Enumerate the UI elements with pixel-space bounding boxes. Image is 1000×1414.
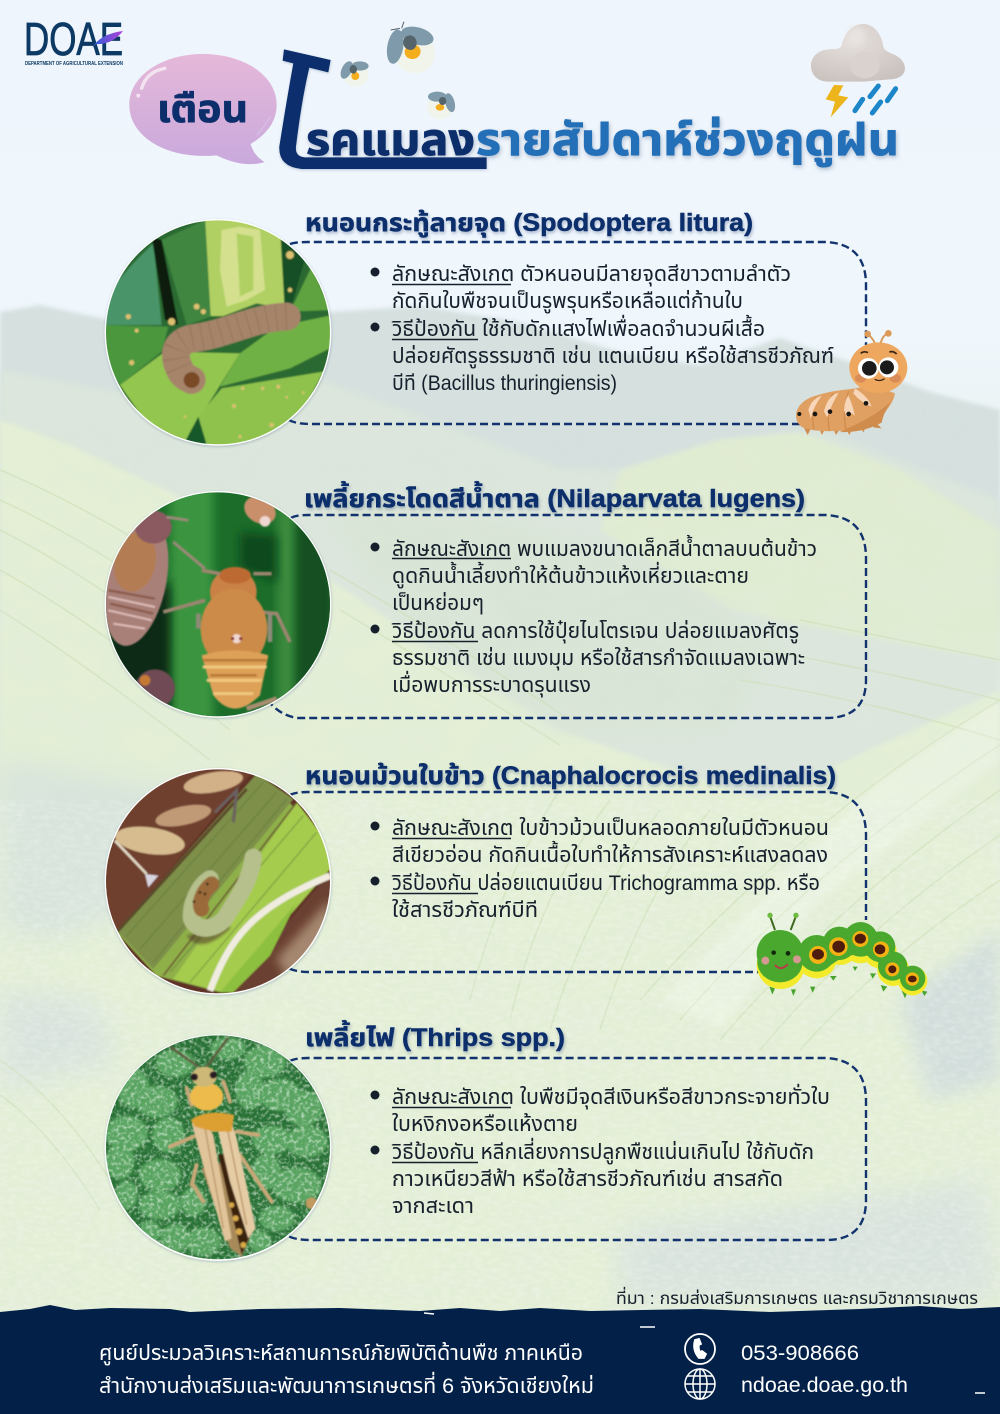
bullet list: signs and prevention: ลักษณะสังเกต ใบข้าวม้วนเป็นหลอดภายในมีตัวหนอน — [392, 816, 829, 840]
photo: rice leaf folder larva — [104, 768, 333, 997]
bullet list: signs and prevention: วิธีป้องกัน หลีกเลี่ยงการปลูกพืชแน่นเกินไป ใช้กับดัก — [392, 1137, 814, 1165]
title: โรคแมลงรายสัปดาห์ช่วงฤดูฝน: รายสัปดาห์ช่วงฤดูฝน — [476, 116, 899, 167]
bullet list: signs and prevention: ดูดกินน้ำเลี้ยงทำให้ต้นข้าวแห้งเหี่ยวและตาย — [392, 561, 749, 589]
bullet list: signs and prevention: วิธีป้องกัน ใช้กับดักแสงไฟเพื่อลดจำนวนผีเสื้อ — [392, 314, 765, 341]
heading: หนอนม้วนใบข้าว (Cnaphalocrocis medinalis) — [305, 762, 836, 790]
logo: DOAE: DOAE — [24, 13, 123, 65]
bullet list: signs and prevention: วิธีป้องกัน ปล่อยแตนเบียน Trichogramma spp. หรือ — [392, 871, 820, 895]
organisation name: สำนักงานส่งเสริมและพัฒนาการเกษตรที่ 6 จังหวัดเชียงใหม่ — [99, 1371, 594, 1398]
heading: หนอนกระทู้ลายจุด (Spodoptera litura) — [305, 209, 753, 238]
bullet list: signs and prevention: กัดกินใบพืชจนเป็นรูพรุนหรือเหลือแต่ก้านใบ — [392, 289, 743, 314]
bullet list: signs and prevention: ธรรมชาติ เช่น แมงมุม หรือใช้สารกำจัดแมลงเฉพาะ — [392, 646, 805, 671]
mottled haze — [472, 640, 960, 992]
icon: rain cloud with lightning — [811, 24, 905, 117]
icon: green caterpillar — [757, 913, 927, 998]
background: misty tea plantation landscape — [0, 304, 1000, 1312]
heading: เพลี้ยไฟ (Thrips spp.) — [305, 1020, 565, 1052]
icon: phone — [685, 1334, 715, 1364]
section: หนอนม้วนใบข้าว — [90, 759, 927, 999]
bullet list: signs and prevention — [370, 1083, 830, 1218]
bullet list: signs and prevention — [370, 816, 829, 922]
bullet list: signs and prevention: วิธีป้องกัน ลดการใช้ปุ๋ยไนโตรเจน ปล่อยแมลงศัตรู — [392, 619, 799, 644]
organisation name: ศูนย์ประมวลวิเคราะห์สถานการณ์ภัยพิบัติด้านพืช ภาคเหนือ — [99, 1341, 583, 1366]
bullet list: signs and prevention: ลักษณะสังเกต ใบพืชมีจุดสีเงินหรือสีขาวกระจายทั่วใบ — [392, 1083, 830, 1110]
icon: fireflies — [338, 22, 457, 119]
bullet list: signs and prevention — [370, 263, 834, 395]
section: หนอนกระทู้ลายจุด — [90, 209, 907, 450]
bullet list: signs and prevention: เป็นหย่อมๆ — [392, 591, 484, 615]
photo: thrips on leaf — [104, 1034, 333, 1264]
heading: เพลี้ยกระโดดสีน้ำตาล (Nilaparvata lugens) — [304, 481, 805, 513]
title flourish: enlarged stem and underline of the first letter — [279, 49, 487, 169]
dashed frame — [271, 515, 866, 718]
phone number: 053-908666 — [741, 1342, 859, 1365]
website: ndoae.doae.go.th — [741, 1374, 908, 1397]
logo wing accent — [92, 31, 123, 48]
footer band — [0, 1286, 1000, 1414]
photo: brown planthopper on rice stem — [104, 490, 333, 720]
section: เพลี้ยกระโดดสีน้ำตาล — [90, 481, 866, 722]
icon: orange caterpillar — [796, 330, 907, 435]
organisation name — [99, 1341, 594, 1398]
bullet list: signs and prevention: บีที (Bacillus thuringiensis) — [392, 372, 617, 395]
bullet list: signs and prevention — [370, 534, 817, 698]
dashed frame — [288, 792, 866, 972]
dashed frame — [289, 242, 866, 424]
bullet list: signs and prevention: ใบหงิกงอหรือแห้งตาย — [392, 1112, 578, 1136]
bullet list: signs and prevention: จากสะเดา — [392, 1195, 474, 1218]
bullet list: signs and prevention: กาวเหนียวสีฟ้า หรือใช้สารชีวภัณฑ์เช่น สารสกัด — [392, 1167, 783, 1191]
bullet list: signs and prevention: ปล่อยศัตรูธรรมชาติ เช่น แตนเบียน หรือใช้สารชีวภัณฑ์ — [392, 344, 834, 369]
section: เพลี้ยไฟ — [90, 1020, 866, 1265]
dashed frame — [288, 1058, 866, 1240]
bullet list: signs and prevention: ลักษณะสังเกต พบแมลงขนาดเล็กสีน้ำตาลบนต้นข้าว — [392, 534, 817, 561]
photo: armyworm on maize leaf — [104, 218, 333, 448]
bullet list: signs and prevention: ใช้สารชีวภัณฑ์บีที — [392, 898, 538, 922]
logo: DOAE: DEPARTMENT OF AGRICULTURAL EXTENSION — [25, 61, 123, 67]
speech bubble: เตือน: เตือน — [157, 89, 248, 131]
bullet list: signs and prevention: ลักษณะสังเกต ตัวหนอนมีลายจุดสีขาวตามลำตัว — [392, 263, 791, 287]
bullet list: signs and prevention: สีเขียวอ่อน กัดกินเนื้อใบทำให้การสังเคราะห์แสงลดลง — [392, 840, 828, 867]
terrace rows — [0, 470, 1000, 1210]
title: โรคแมลงรายสัปดาห์ช่วงฤดูฝน — [279, 49, 899, 169]
speech bubble: เตือน — [129, 54, 277, 164]
title: โรคแมลงรายสัปดาห์ช่วงฤดูฝน: รคแมลง — [306, 116, 475, 165]
bullet list: signs and prevention: เมื่อพบการระบาดรุนแรง — [392, 670, 591, 698]
source credit: ที่มา : กรมส่งเสริมการเกษตร และกรมวิชาการเกษตร — [616, 1286, 978, 1308]
icon: globe — [685, 1369, 715, 1399]
